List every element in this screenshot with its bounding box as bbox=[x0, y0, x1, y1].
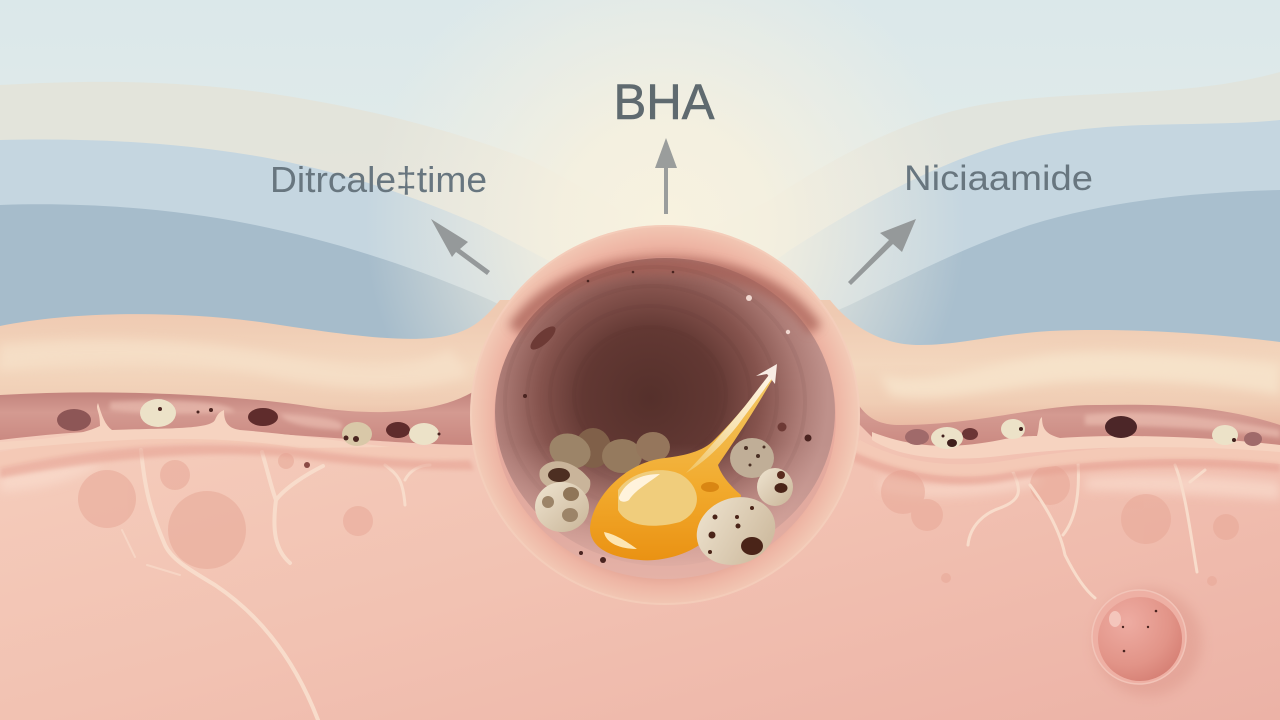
arrow to left label bbox=[431, 219, 490, 275]
background sky with wavy bands bbox=[0, 0, 1280, 420]
cyst bubble lower right bbox=[1092, 588, 1202, 696]
stone right small bbox=[757, 468, 793, 506]
label: BHA: BHA bbox=[614, 74, 715, 130]
subcutaneous circles and cells bbox=[78, 453, 1239, 586]
white arrow on oil tail bbox=[756, 364, 777, 384]
pale vessels in lower skin bbox=[122, 450, 1205, 720]
left oil channel bbox=[0, 380, 475, 445]
soft shadow below membrane bbox=[0, 444, 1280, 485]
upper skin shading folds bbox=[0, 340, 1280, 398]
arrow to right label bbox=[848, 219, 916, 285]
label: Niciaamide: Niciaamide bbox=[904, 159, 1093, 198]
back stones in pore bbox=[539, 428, 670, 495]
right channel deposits bbox=[905, 416, 1262, 449]
stone large bbox=[687, 486, 785, 576]
sebum blobs right bbox=[905, 416, 1262, 446]
stones left bbox=[140, 399, 439, 446]
pale band beneath membrane bbox=[0, 462, 1280, 500]
channel highlights bbox=[110, 400, 1280, 438]
pore outer ring bbox=[470, 225, 860, 605]
stones right bbox=[931, 419, 1238, 449]
label: Ditrcale time: Ditrcale‡time bbox=[270, 159, 487, 200]
arrow up to BHA bbox=[655, 138, 677, 214]
ring crease highlight bbox=[471, 226, 859, 604]
lower skin layer bbox=[0, 370, 1280, 720]
left thin band bbox=[0, 403, 390, 450]
specks left bbox=[158, 407, 440, 468]
pore specks bbox=[523, 271, 812, 563]
right oil channel bbox=[855, 380, 1280, 450]
left channel deposits bbox=[57, 399, 440, 468]
specks right bbox=[942, 427, 1236, 447]
right membrane band bbox=[850, 440, 1280, 477]
sebum blobs left bbox=[57, 408, 410, 438]
pore interior funnel bbox=[494, 257, 836, 579]
stone left bbox=[535, 482, 589, 532]
left membrane band bbox=[0, 433, 470, 468]
right thin band bbox=[872, 417, 1280, 459]
stone upper right bbox=[730, 438, 774, 478]
oil droplet bbox=[590, 371, 776, 560]
front stones in pore bbox=[535, 438, 793, 576]
upper skin layer bbox=[0, 300, 1280, 425]
